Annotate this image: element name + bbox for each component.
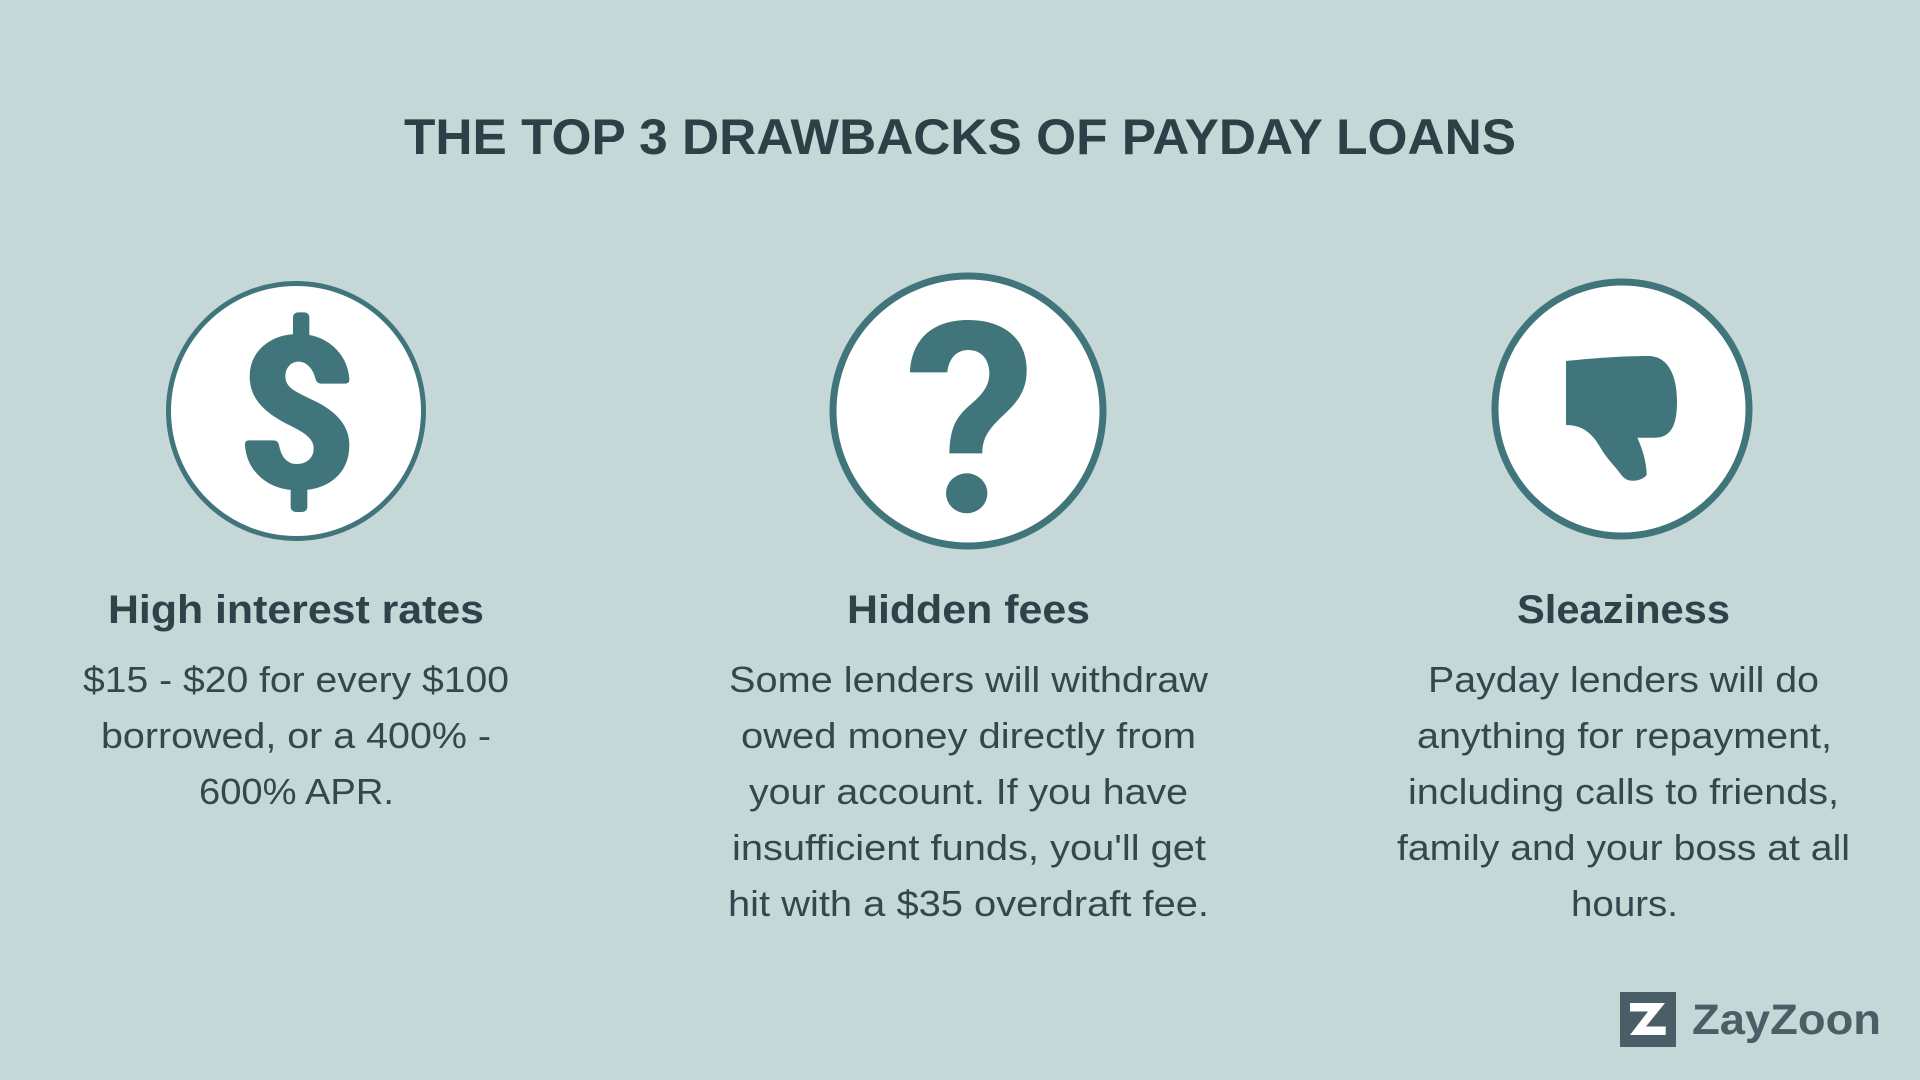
panel: hidden fees [728,276,1209,924]
text: hidden fees description: hit with a $35 overdraft fee. [728,883,1209,924]
icon: dollar sign in circle [168,284,424,538]
panel: high interest rates [83,284,509,812]
text: hidden fees description [728,659,1209,924]
text: hidden fees description: Some lenders will withdraw [729,659,1209,700]
text: sleaziness description [1397,659,1850,924]
icon: question mark in circle [833,276,1103,546]
text: sleaziness description: hours. [1571,883,1678,924]
text: high interest rates description: borrowed, or a 400% - [101,715,491,756]
heading: hidden fees: Hidden fees [847,588,1090,632]
heading: sleaziness: Sleaziness [1517,588,1730,632]
text: high interest rates description [83,659,509,812]
icon: Z mark [1620,992,1676,1047]
text: sleaziness description: including calls to friends, [1408,771,1839,812]
text: high interest rates description: 600% APR. [199,771,394,812]
text: hidden fees description: owed money directly from [741,715,1196,756]
wordmark: ZayZoon [1692,996,1881,1044]
text: sleaziness description: anything for repayment, [1417,715,1832,756]
panel: sleaziness [1397,282,1850,924]
text: sleaziness description: family and your boss at all [1397,827,1850,868]
heading: high interest rates: High interest rates [108,588,484,632]
text: hidden fees description: your account. If you have [749,771,1188,812]
text: sleaziness description: Payday lenders will do [1428,659,1819,700]
text: hidden fees description: insufficient funds, you'll get [732,827,1206,868]
title: THE TOP 3 DRAWBACKS OF PAYDAY LOANS [404,109,1516,165]
text: high interest rates description: $15 - $20 for every $100 [83,659,509,700]
icon detail: question mark dot [946,473,987,513]
icon: thumbs down in circle [1495,282,1749,536]
logo: ZayZoon [1620,992,1881,1047]
